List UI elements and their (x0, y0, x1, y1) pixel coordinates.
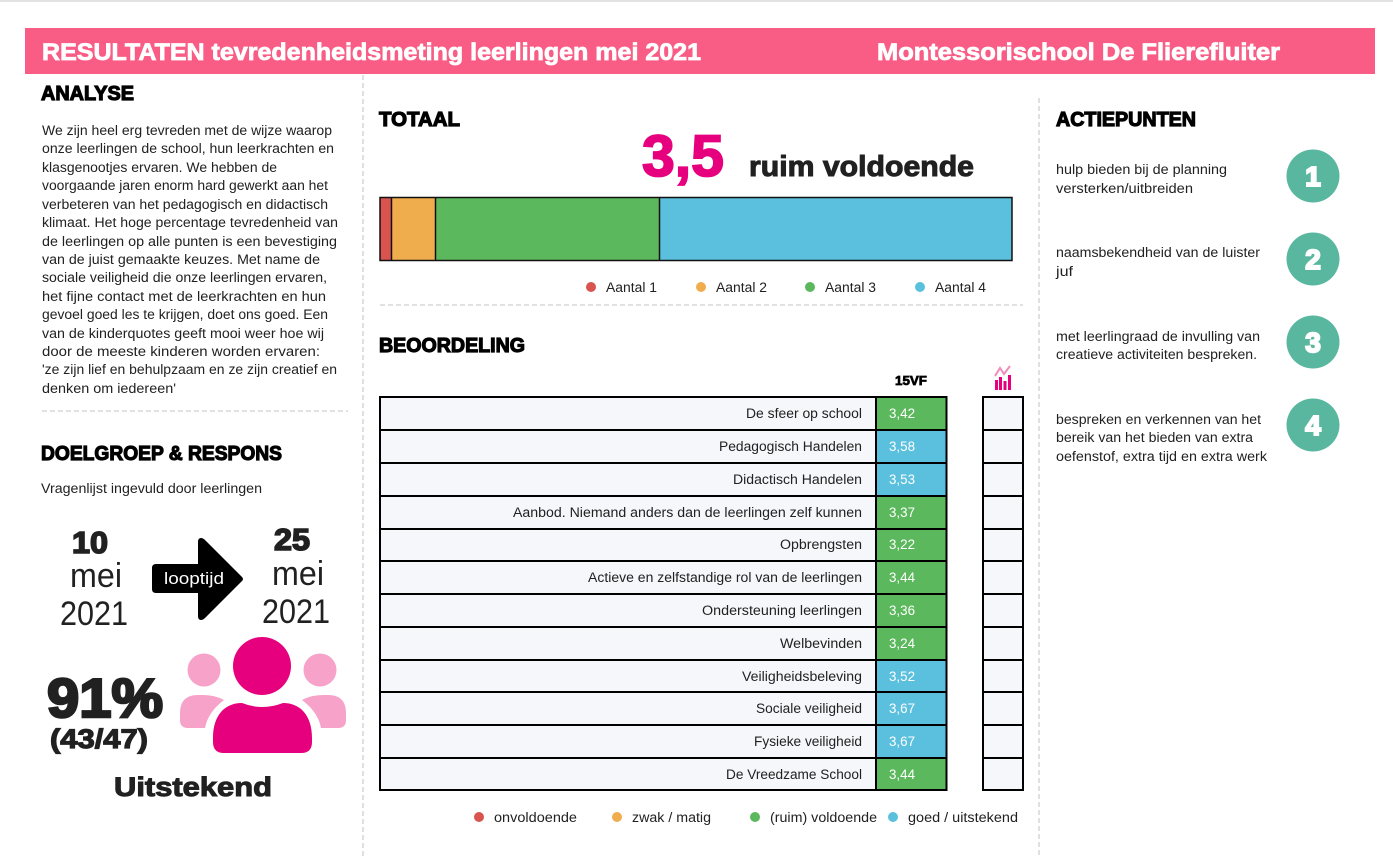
action 3: met leerlingraad de invulling van (1056, 329, 1260, 344)
arrow: looptijd (152, 538, 243, 620)
end date: 25 (274, 522, 310, 557)
analysis text block: van de kinderquotes geeft mooi weer hoe wij (42, 326, 324, 341)
row values: 3,52 (889, 669, 915, 684)
action 3: creatieve activiteiten bespreken. (1056, 347, 1257, 362)
icon: chart (995, 366, 1011, 390)
action 3: 3 (1305, 327, 1321, 358)
row values (889, 406, 915, 782)
response percentage: (43/47) (50, 724, 148, 754)
response percentage (47, 667, 163, 754)
start date: 10 (72, 525, 108, 560)
row labels: De Vreedzame School (726, 767, 862, 782)
row labels: Sociale veiligheid (756, 701, 862, 716)
panel: actiepunten: ACTIEPUNTEN (1056, 108, 1196, 131)
stacked bar chart (380, 197, 1012, 261)
row values: 3,37 (889, 505, 915, 520)
bar legend: Aantal 2 (716, 280, 767, 295)
panel: analyse (41, 82, 338, 396)
row labels (513, 406, 862, 782)
total score: ruim voldoende (749, 151, 974, 183)
action 4: 4 (1305, 410, 1321, 441)
bar legend: Aantal 3 (825, 280, 876, 295)
action 4 (1056, 398, 1340, 464)
row values: 3,22 (889, 537, 915, 552)
row labels: Fysieke veiligheid (754, 734, 862, 749)
rating label: Uitstekend (114, 772, 272, 802)
action 1: 1 (1305, 161, 1321, 192)
bar legend (586, 280, 986, 295)
analysis text block: door de meeste kinderen worden ervaren: (42, 344, 320, 359)
total score: 3,5 (642, 124, 724, 189)
start date: 2021 (60, 595, 128, 633)
end date (262, 522, 330, 631)
action 1 (1056, 150, 1340, 202)
panel: beoordeling: BEOORDELING (379, 334, 525, 357)
analysis text block: voorgaande jaren enorm hard gewerkt aan het (42, 178, 328, 193)
panel: totaal: TOTAAL (379, 108, 460, 131)
panel: doelgroep en respons: DOELGROEP & RESPONS (41, 442, 282, 465)
bar legend: Aantal 1 (606, 280, 657, 295)
analysis text block: verbeteren van het pedagogisch en didactisch (42, 197, 328, 212)
row labels: Aanbod. Niemand anders dan de leerlingen zelf kunnen (513, 505, 862, 520)
row values: 3,44 (889, 767, 915, 782)
analysis text block: onze leerlingen de school, hun leerkrachten en (42, 141, 334, 156)
panel: actiepunten (1055, 108, 1340, 464)
action 4: bespreken en verkennen van het (1056, 412, 1261, 427)
row values: 3,36 (889, 603, 915, 618)
action 3 (1056, 316, 1340, 368)
results table (379, 396, 1024, 791)
row values: 3,24 (889, 636, 915, 651)
analysis text block: het fijne contact met de leerkrachten en hun (42, 289, 326, 304)
panel: beoordeling (379, 334, 1024, 825)
start date: mei (70, 557, 122, 595)
end date: mei (272, 555, 324, 593)
start date (60, 525, 128, 633)
row values: 3,67 (889, 701, 915, 716)
row labels: Veiligheidsbeleving (742, 669, 862, 684)
row values: 3,58 (889, 439, 915, 454)
row values: 3,67 (889, 734, 915, 749)
action 4: bereik van het bieden van extra (1056, 430, 1254, 445)
analysis text block: sociale veiligheid die onze leerlingen ervaren, (42, 270, 327, 285)
action 1: hulp bieden bij de planning (1056, 162, 1227, 177)
total score (642, 124, 974, 189)
row labels: De sfeer op school (746, 406, 862, 421)
action 1: versterken/uitbreiden (1056, 181, 1193, 196)
row labels: Actieve en zelfstandige rol van de leerlingen (588, 570, 862, 585)
action 2 (1055, 232, 1340, 286)
row labels: Ondersteuning leerlingen (702, 603, 862, 618)
row labels: Opbrengsten (780, 537, 862, 552)
action 2: juf (1055, 264, 1073, 279)
response percentage: 91% (47, 667, 163, 729)
header banner (25, 28, 1375, 74)
row labels: Didactisch Handelen (733, 472, 862, 487)
table legend (474, 810, 1018, 825)
analysis text block: gevoel goed les te krijgen, doet ons goed. Een (42, 307, 328, 322)
panel: doelgroep en respons (41, 442, 346, 802)
table legend: (ruim) voldoende (770, 810, 877, 825)
table legend: onvoldoende (494, 810, 577, 825)
table legend: goed / uitstekend (908, 810, 1018, 825)
header banner: Montessorischool De Flierefluiter (877, 39, 1280, 66)
row labels: Welbevinden (780, 636, 862, 651)
analysis text block: klimaat. Het hoge percentage tevredenheid van (42, 215, 338, 230)
table legend: zwak / matig (632, 810, 711, 825)
action 4: oefenstof, extra tijd en extra werk (1056, 449, 1267, 464)
analysis text block: We zijn heel erg tevreden met de wijze waarop (42, 123, 332, 138)
action 2: 2 (1305, 244, 1321, 275)
row values: 3,44 (889, 570, 915, 585)
header banner: RESULTATEN tevredenheidsmeting leerlingen mei 2021 (42, 39, 701, 66)
value cells (876, 397, 946, 790)
panel: totaal (379, 108, 1012, 295)
analysis text block: 'ze zijn lief en behulpzaam en ze zijn creatief en (42, 362, 337, 377)
panel: analyse: ANALYSE (41, 82, 134, 105)
analysis text block (42, 123, 338, 396)
analysis text block: denken om iedereen' (42, 381, 176, 396)
end date: 2021 (262, 593, 330, 631)
arrow: looptijd: looptijd (164, 569, 224, 588)
row values: 3,53 (889, 472, 915, 487)
row values: 3,42 (889, 406, 915, 421)
action 2: naamsbekendheid van de luister (1056, 245, 1261, 260)
bar legend: Aantal 4 (935, 280, 986, 295)
analysis text block: van de juist gemaakte keuzes. Met name de (42, 252, 320, 267)
analysis text block: klasgenootjes ervaren. We hebben de (42, 160, 277, 175)
panel: doelgroep en respons: Vragenlijst ingevuld door leerlingen (41, 481, 262, 496)
row labels: Pedagogisch Handelen (719, 439, 862, 454)
column header 15VF: 15VF (895, 374, 927, 388)
icon: people group (180, 637, 346, 753)
analysis text block: de leerlingen op alle punten is een bevestiging (42, 234, 337, 249)
